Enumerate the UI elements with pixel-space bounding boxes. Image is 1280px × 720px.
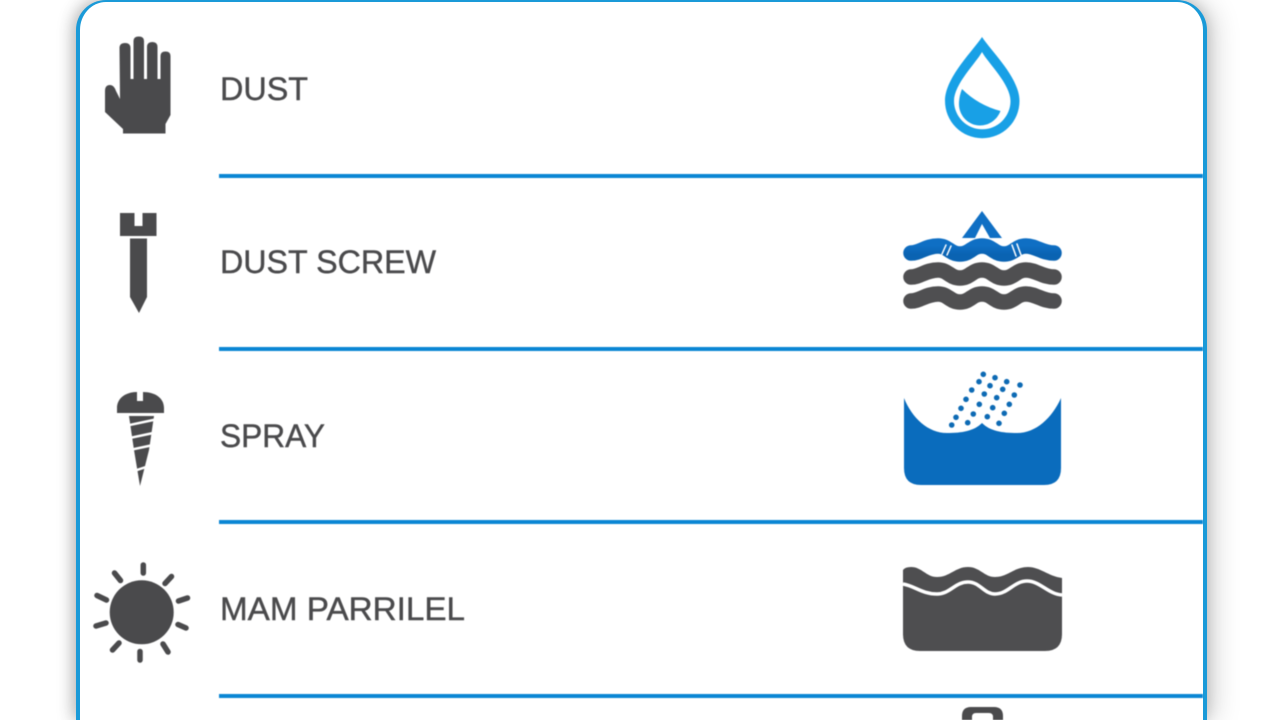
row 5: partially visible icon <box>962 707 1003 720</box>
row 4: mam parrilel <box>96 565 1062 660</box>
label: spray: SPRAY <box>220 418 325 454</box>
icon: waves with chevron <box>911 211 1054 302</box>
label: dust screw: DUST SCREW <box>220 244 437 280</box>
row 2: dust screw <box>120 211 1054 313</box>
icon: water basin with spray <box>904 372 1061 485</box>
icon: sun <box>96 565 188 660</box>
label: mam parrilel: MAM PARRILEL <box>220 591 465 627</box>
row 3: spray <box>117 372 1061 486</box>
label: dust: DUST <box>220 71 308 107</box>
icon: water drop <box>945 37 1020 138</box>
icon: wood screw <box>117 392 164 486</box>
icon: hand <box>105 36 170 134</box>
icon: slotted screw <box>120 213 156 313</box>
icon: dark water basin <box>903 567 1062 651</box>
row 1: dust <box>105 36 1020 138</box>
